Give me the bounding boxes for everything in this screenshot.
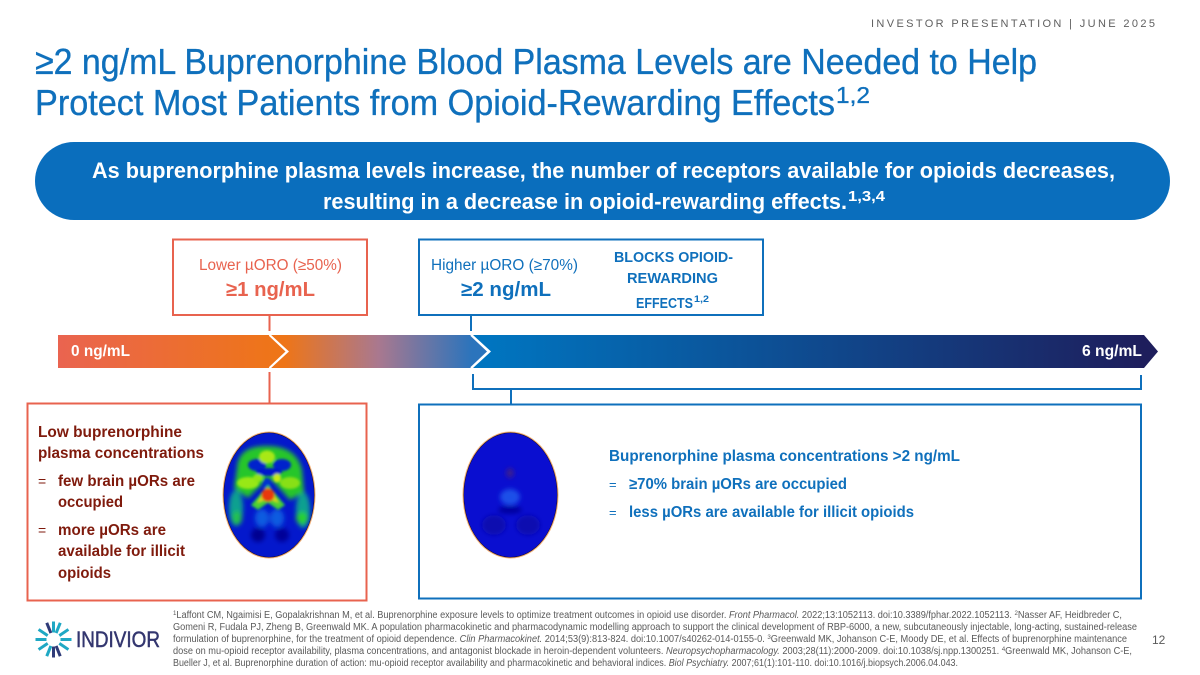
concentration arrow bar: 6 ng/mL [1082,343,1142,360]
footnotes: 4 [1002,646,1006,653]
banner callout: resulting in a decrease in opioid-rewarding effects. [323,189,847,214]
panel: high buprenorphine: ≥70% brain µORs are occupied [629,476,847,493]
panel: low buprenorphine: = [38,522,46,538]
box: lower muORO: Lower µORO (≥50%) [199,257,342,274]
box: higher muORO: REWARDING [627,271,718,287]
footnotes: dose on mu-opioid receptor availability, plasma concentrations, and antagonist blockade in heroin-dependent volunteers. Neuropsychopharmacology. 2003;28(11):2000-2009. doi:10.1038/sj.npp.1300251. [173,646,1011,657]
footnotes: Front Pharmacol. 2022;13:1052113. doi:10.3389/fphar.2022.1052113. [729,610,1024,621]
panel: low buprenorphine: occupied [58,494,123,511]
concentration arrow bar [58,335,1158,368]
title [35,41,1037,123]
connector: lower box to bar [268,315,270,331]
footnotes: Greenwald MK, Johanson C-E, Moody DE, et al. Effects of buprenorphine maintenance [771,634,1127,645]
panel: low buprenorphine: = [38,473,46,489]
brain scan: high occupancy [460,430,562,560]
banner callout: 1,3,4 [848,189,885,205]
title: 1,2 [836,82,870,108]
box: higher muORO: EFFECTS [636,296,693,312]
box: lower muORO: ≥1 ng/mL [226,279,315,301]
panel: low buprenorphine: more µORs are [58,522,166,539]
brain scan: low occupancy [220,430,320,560]
footnotes: Bueller J, et al. Buprenorphine duration of action: mu-opioid receptor availability and pharmacokinetic and behavioral indices. Biol Psychiatry. 2007;61(1):101-110. doi:10.1016/j.biopsych.2006.04.043. [173,658,958,669]
box: higher muORO [419,240,763,315]
box: lower muORO [173,240,367,315]
panel: low buprenorphine: plasma concentrations [38,445,204,462]
footnotes: 3 [767,634,771,641]
panel: high buprenorphine: less µORs are available for illicit opioids [629,504,914,521]
logo: Indivior [36,622,160,658]
concentration arrow bar: 0 ng/mL [71,343,130,360]
footnotes: Nasser AF, Heidbreder C, [1018,610,1122,621]
title: ≥2 ng/mL Buprenorphine Blood Plasma Levels are Needed to Help [35,41,1037,82]
bracket: bar to high box [473,374,1141,404]
banner callout: As buprenorphine plasma levels increase, the number of receptors available for opioids decreases, [92,158,1115,183]
box: higher muORO: BLOCKS OPIOID- [614,250,733,266]
panel: low buprenorphine: opioids [58,565,111,582]
box: higher muORO: 1,2 [694,294,709,305]
panel: low buprenorphine: available for illicit [58,543,186,560]
footnotes: formulation of buprenorphine, for the treatment of opioid dependence. Clin Pharmacokinet. 2014;53(9):813-824. doi:10.1007/s40262-014-0155-0. [173,634,776,645]
footnotes: 2 [1014,610,1018,617]
box: higher muORO: Higher µORO (≥70%) [431,257,578,274]
footnotes: Laffont CM, Ngaimisi E, Gopalakrishnan M, et al. Buprenorphine exposure levels to optimize treatment outcomes in opioid use disorder. [176,610,729,621]
panel: high buprenorphine: Buprenorphine plasma concentrations >2 ng/mL [609,448,960,465]
footnotes [173,610,1137,669]
footnotes: Gomeni R, Fudala PJ, Zheng B, Greenwald MK. A population pharmacokinetic and pharmacodynamic modelling approach to support the clinical development of RBP-6000, a new, subcutaneously injectable, long-acting, sustained-release [173,622,1137,633]
logo: Indivior: INDIVIOR [76,627,160,652]
banner callout [35,142,1170,220]
box: higher muORO: ≥2 ng/mL [461,279,551,301]
connector: bar to low box [268,372,270,403]
page number: 12 [1152,633,1166,647]
panel: low buprenorphine: few brain µORs are [58,473,195,490]
panel: low buprenorphine [28,404,366,600]
header label: INVESTOR PRESENTATION | JUNE 2025 [871,18,1155,30]
connector: higher box to bar [470,315,472,331]
footnotes: 1 [173,610,177,617]
panel: high buprenorphine: = [609,505,617,520]
panel: high buprenorphine: = [609,477,617,492]
panel: low buprenorphine: Low buprenorphine [38,424,182,441]
title: Protect Most Patients from Opioid-Rewarding Effects [35,82,835,123]
footnotes: Greenwald MK, Johanson C-E, [1005,646,1132,657]
panel: high buprenorphine [419,404,1141,598]
